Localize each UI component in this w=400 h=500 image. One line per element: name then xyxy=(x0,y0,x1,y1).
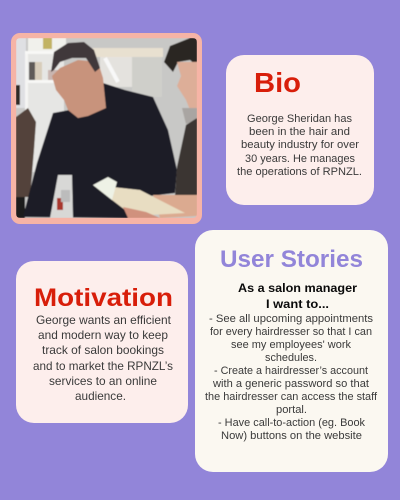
user stories list: portal. xyxy=(276,404,307,416)
motivation text xyxy=(33,313,173,403)
user stories list: schedules. xyxy=(265,352,317,364)
bio text: 30 years. He manages xyxy=(245,153,355,165)
subheading xyxy=(238,283,358,311)
user stories list: the hairdresser can access the staff xyxy=(205,391,378,403)
bio text xyxy=(237,113,362,178)
user stories list: for every hairdresser so that I can xyxy=(210,326,372,338)
heading: Motivation: Motivation xyxy=(34,284,173,312)
heading: User Stories: User Stories xyxy=(220,246,363,273)
bio text: George Sheridan has xyxy=(247,113,352,125)
panel: user stories xyxy=(195,230,388,472)
panel: bio xyxy=(226,55,374,205)
panel: motivation xyxy=(16,261,188,423)
motivation text: and modern way to keep xyxy=(38,328,168,342)
user stories list: Now) buttons on the website xyxy=(221,430,362,442)
user stories list: see my employees' work xyxy=(231,339,351,351)
motivation text: and to market the RPNZL’s xyxy=(33,359,173,373)
heading: Bio: Bio xyxy=(254,67,301,98)
bio text: the operations of RPNZL. xyxy=(237,166,362,178)
motivation text: services to an online xyxy=(49,374,157,388)
subheading: As a salon manager xyxy=(238,283,358,295)
user stories list: - Have call-to-action (eg. Book xyxy=(218,417,365,429)
bio text: been in the hair and xyxy=(249,126,350,138)
user stories list: - Create a hairdresser’s account xyxy=(214,365,368,377)
bio text: beauty industry for over xyxy=(241,139,359,151)
subheading: I want to... xyxy=(266,299,329,311)
motivation text: audience. xyxy=(75,389,126,403)
photo: George Sheridan in salon xyxy=(11,33,202,224)
motivation text: George wants an efficient xyxy=(36,313,172,327)
user stories list: - See all upcoming appointments xyxy=(209,313,373,325)
user stories list: with a generic password so that xyxy=(212,378,369,390)
motivation text: track of salon bookings xyxy=(42,343,164,357)
user stories list xyxy=(205,313,378,442)
